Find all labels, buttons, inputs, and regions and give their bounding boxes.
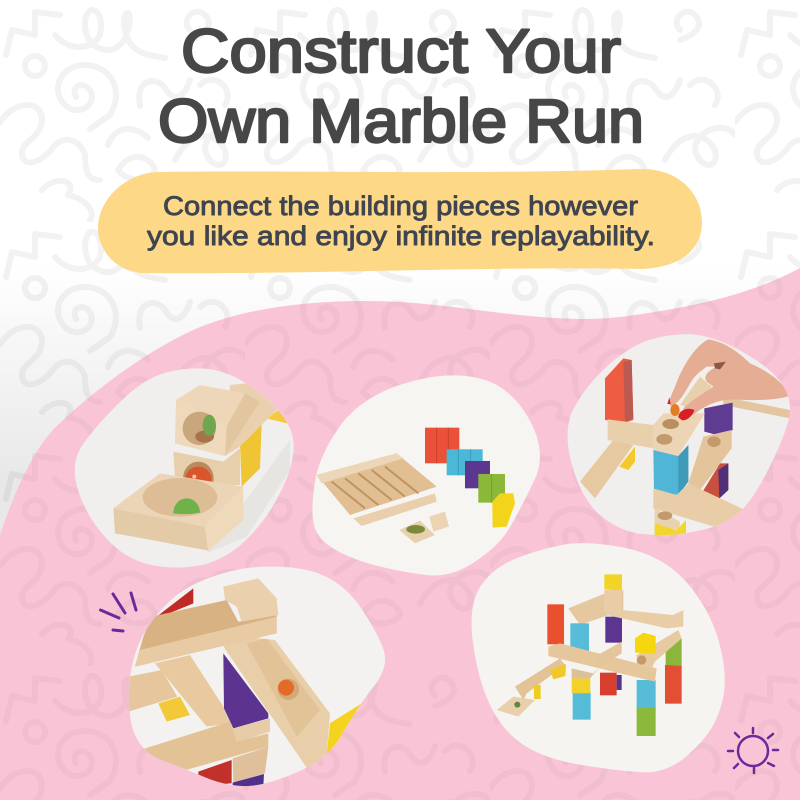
photo: marble blocks close-up <box>74 368 294 568</box>
photo: pieces laid out by colour <box>312 375 540 576</box>
pink wave background <box>0 268 800 800</box>
photo: completed marble run <box>472 543 725 772</box>
title <box>158 17 644 155</box>
icon: purple sun <box>728 728 778 773</box>
icon: purple spark lines <box>100 593 136 631</box>
subtitle pill: Connect the building pieces however <box>163 191 638 221</box>
title: Construct Your <box>181 17 621 85</box>
title: Own Marble Run <box>158 87 644 155</box>
subtitle pill: you like and enjoy infinite replayability. <box>147 221 655 251</box>
photo: close-up of sloped rails <box>125 560 390 790</box>
photo: hand placing a marble <box>568 334 790 536</box>
subtitle pill <box>98 169 702 273</box>
